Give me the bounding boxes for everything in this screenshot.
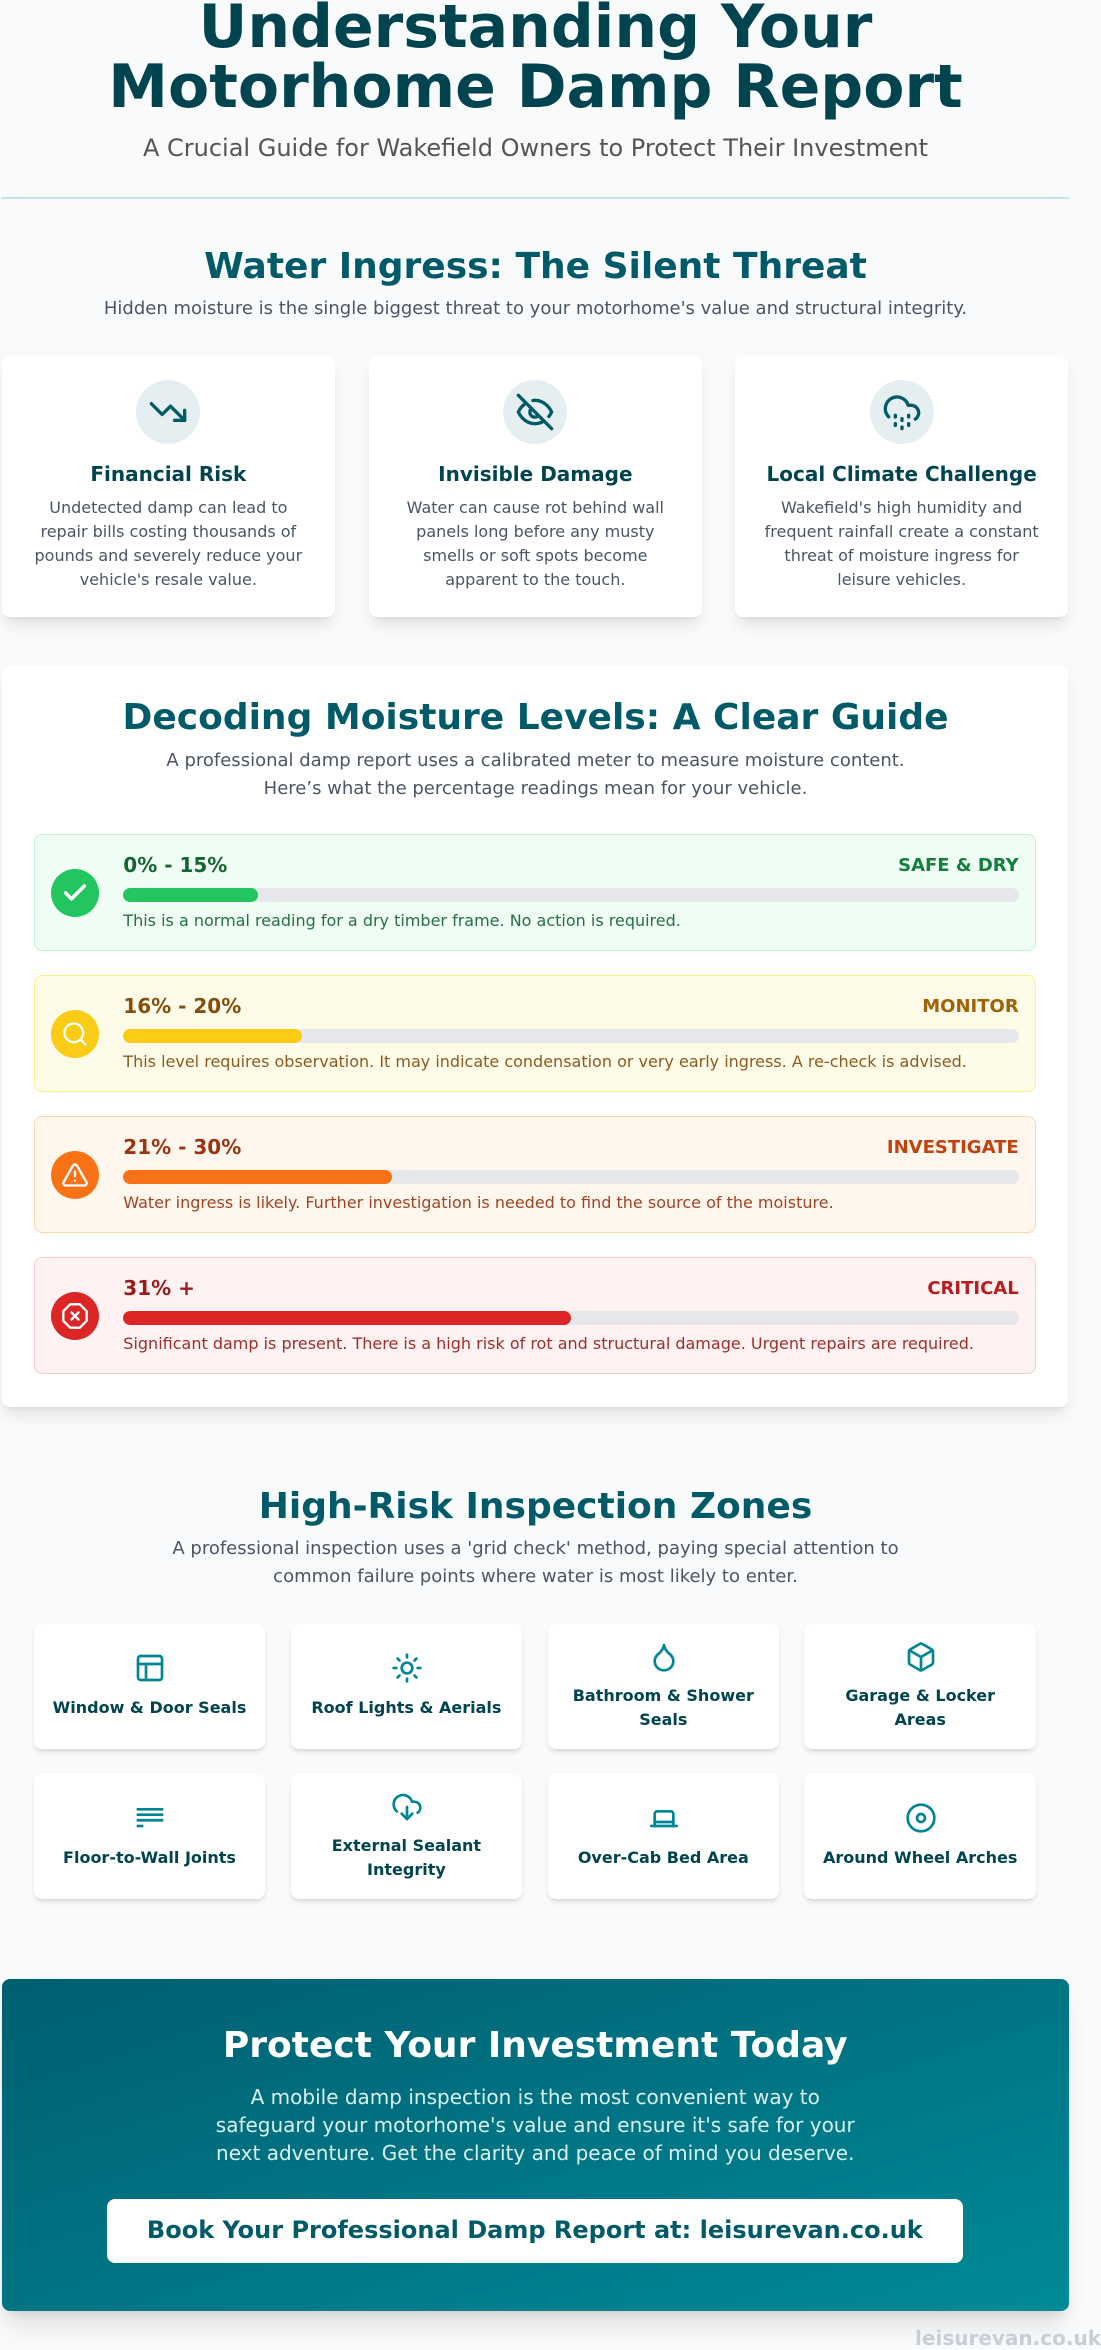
zone label: Roof Lights & Aerials — [311, 1698, 501, 1717]
card text: leisure vehicles. — [837, 570, 966, 589]
card text: threat of moisture ingress for — [784, 546, 1019, 565]
progress bar 15% — [123, 888, 1019, 902]
progress bar 30% — [123, 1170, 1019, 1184]
intro text: moisture levels: Here’s what the percentage readings mean for your vehicle. — [264, 778, 807, 798]
zone label: Around Wheel Arches — [823, 1848, 1017, 1867]
level row: monitor — [34, 975, 1036, 1092]
intro text: moisture levels: A professional damp report uses a calibrated meter to measure moisture content. — [166, 750, 905, 770]
icon: cloud download — [392, 1794, 422, 1820]
zone: floor-to-wall joints — [34, 1774, 265, 1899]
status label: CRITICAL — [927, 1278, 1019, 1299]
title — [108, 0, 963, 122]
description: Significant damp is present. There is a high risk of rot and structural damage. Urgent repairs are required. — [123, 1334, 974, 1353]
intro text: inspection zones: common failure points where water is most likely to enter. — [273, 1566, 798, 1587]
header divider — [1, 197, 1069, 199]
zone label: Garage & Locker — [845, 1686, 995, 1705]
zone label: External Sealant — [332, 1836, 481, 1855]
icon: search — [51, 1010, 99, 1058]
card text: repair bills costing thousands of — [40, 522, 296, 541]
description: This level requires observation. It may indicate condensation or very early ingress. A re-check is advised. — [123, 1052, 967, 1071]
icon: eye off — [503, 380, 567, 444]
card text: frequent rainfall create a constant — [765, 522, 1039, 541]
level row: critical — [34, 1257, 1036, 1374]
zone: window and door seals — [34, 1624, 265, 1749]
card text — [765, 498, 1039, 589]
card text: smells or soft spots become — [423, 546, 648, 565]
card title: Invisible Damage — [438, 462, 633, 486]
zone label: Floor-to-Wall Joints — [63, 1848, 236, 1867]
zone label: Over-Cab Bed Area — [578, 1848, 749, 1867]
cta heading: Protect Your Investment Today — [223, 2025, 848, 2066]
status label: SAFE & DRY — [898, 855, 1019, 876]
description: Water ingress is likely. Further investigation is needed to find the source of the moisture. — [123, 1193, 834, 1212]
card text — [35, 498, 302, 589]
card text: panels long before any musty — [416, 522, 654, 541]
intro text: water ingress: Hidden moisture is the single biggest threat to your motorhome's value and structural integrity. — [104, 298, 967, 319]
icon: droplet — [653, 1644, 675, 1672]
icon: box — [908, 1642, 934, 1672]
zone label — [332, 1836, 481, 1879]
zone label: Integrity — [367, 1860, 446, 1879]
icon: octagon x — [51, 1292, 99, 1340]
level row: investigate — [34, 1116, 1036, 1233]
card title: Financial Risk — [90, 462, 246, 486]
description: This is a normal reading for a dry timber frame. No action is required. — [123, 911, 681, 930]
icon: sun — [392, 1653, 422, 1683]
zone: around wheel arches — [804, 1774, 1036, 1899]
status label: INVESTIGATE — [887, 1137, 1019, 1158]
range label: 16% - 20% — [123, 994, 241, 1018]
icon: lines — [136, 1808, 164, 1828]
intro text: inspection zones: A professional inspection uses a 'grid check' method, paying special attention to — [172, 1538, 899, 1559]
cta text: A mobile damp inspection is the most convenient way to — [251, 2085, 820, 2109]
zone: bathroom and shower seals — [548, 1624, 779, 1749]
card text: pounds and severely reduce your — [35, 546, 302, 565]
zone: garage and locker areas — [804, 1624, 1036, 1749]
zone label — [573, 1686, 754, 1729]
intro text: inspection zones — [172, 1538, 899, 1587]
range label: 21% - 30% — [123, 1135, 241, 1159]
progress bar 50% — [123, 1311, 1019, 1325]
intro text: moisture levels — [166, 750, 905, 798]
progress bar 20% — [123, 1029, 1019, 1043]
level row: safe and dry — [34, 834, 1036, 951]
zone: external sealant integrity — [291, 1774, 522, 1899]
icon: window — [136, 1654, 164, 1682]
card text: Undetected damp can lead to — [49, 498, 287, 517]
zone: over-cab bed area — [548, 1774, 779, 1899]
icon: trending down — [136, 380, 200, 444]
icon: warning triangle — [51, 1151, 99, 1199]
icon: bed — [650, 1810, 678, 1828]
card text: apparent to the touch. — [445, 570, 625, 589]
cta text: next adventure. Get the clarity and peace of mind you deserve. — [216, 2141, 854, 2165]
panel: decoding moisture levels — [2, 666, 1068, 1407]
heading: moisture levels: Decoding Moisture Levels: A Clear Guide — [122, 696, 949, 738]
heading: inspection zones: High-Risk Inspection Zones — [259, 1486, 812, 1527]
card text: vehicle's resale value. — [80, 570, 257, 589]
cta text: safeguard your motorhome's value and ensure it's safe for your — [216, 2113, 855, 2137]
icon: wheel — [906, 1803, 936, 1833]
zone label — [845, 1686, 995, 1729]
panel: local climate challenge — [735, 356, 1068, 617]
subtitle: A Crucial Guide for Wakefield Owners to Protect Their Investment — [143, 134, 928, 162]
range label: 31% + — [123, 1276, 195, 1300]
card text: Wakefield's high humidity and — [781, 498, 1022, 517]
card title: Local Climate Challenge — [766, 462, 1037, 486]
watermark: leisurevan.co.uk — [915, 2326, 1101, 2350]
heading: water ingress: Water Ingress: The Silent Threat — [204, 246, 867, 286]
zone label: Bathroom & Shower — [573, 1686, 754, 1705]
zone label: Window & Door Seals — [53, 1698, 246, 1717]
icon: check — [51, 869, 99, 917]
zone label: Areas — [894, 1710, 946, 1729]
zone label: Seals — [639, 1710, 687, 1729]
icon: rain cloud — [870, 380, 934, 444]
title: Motorhome Damp Report — [108, 52, 963, 122]
cta text — [216, 2085, 855, 2165]
zone: roof lights and aerials — [291, 1624, 522, 1749]
panel: invisible damage — [369, 356, 702, 617]
card text — [407, 498, 664, 589]
range label: 0% - 15% — [123, 853, 227, 877]
status label: MONITOR — [922, 996, 1019, 1017]
panel: financial risk — [2, 356, 335, 617]
cta button — [107, 2199, 963, 2263]
card text: Water can cause rot behind wall — [407, 498, 664, 517]
cta button: Book Your Professional Damp Report at: leisurevan.co.uk — [147, 2216, 923, 2244]
panel: call to action — [2, 1979, 1069, 2311]
